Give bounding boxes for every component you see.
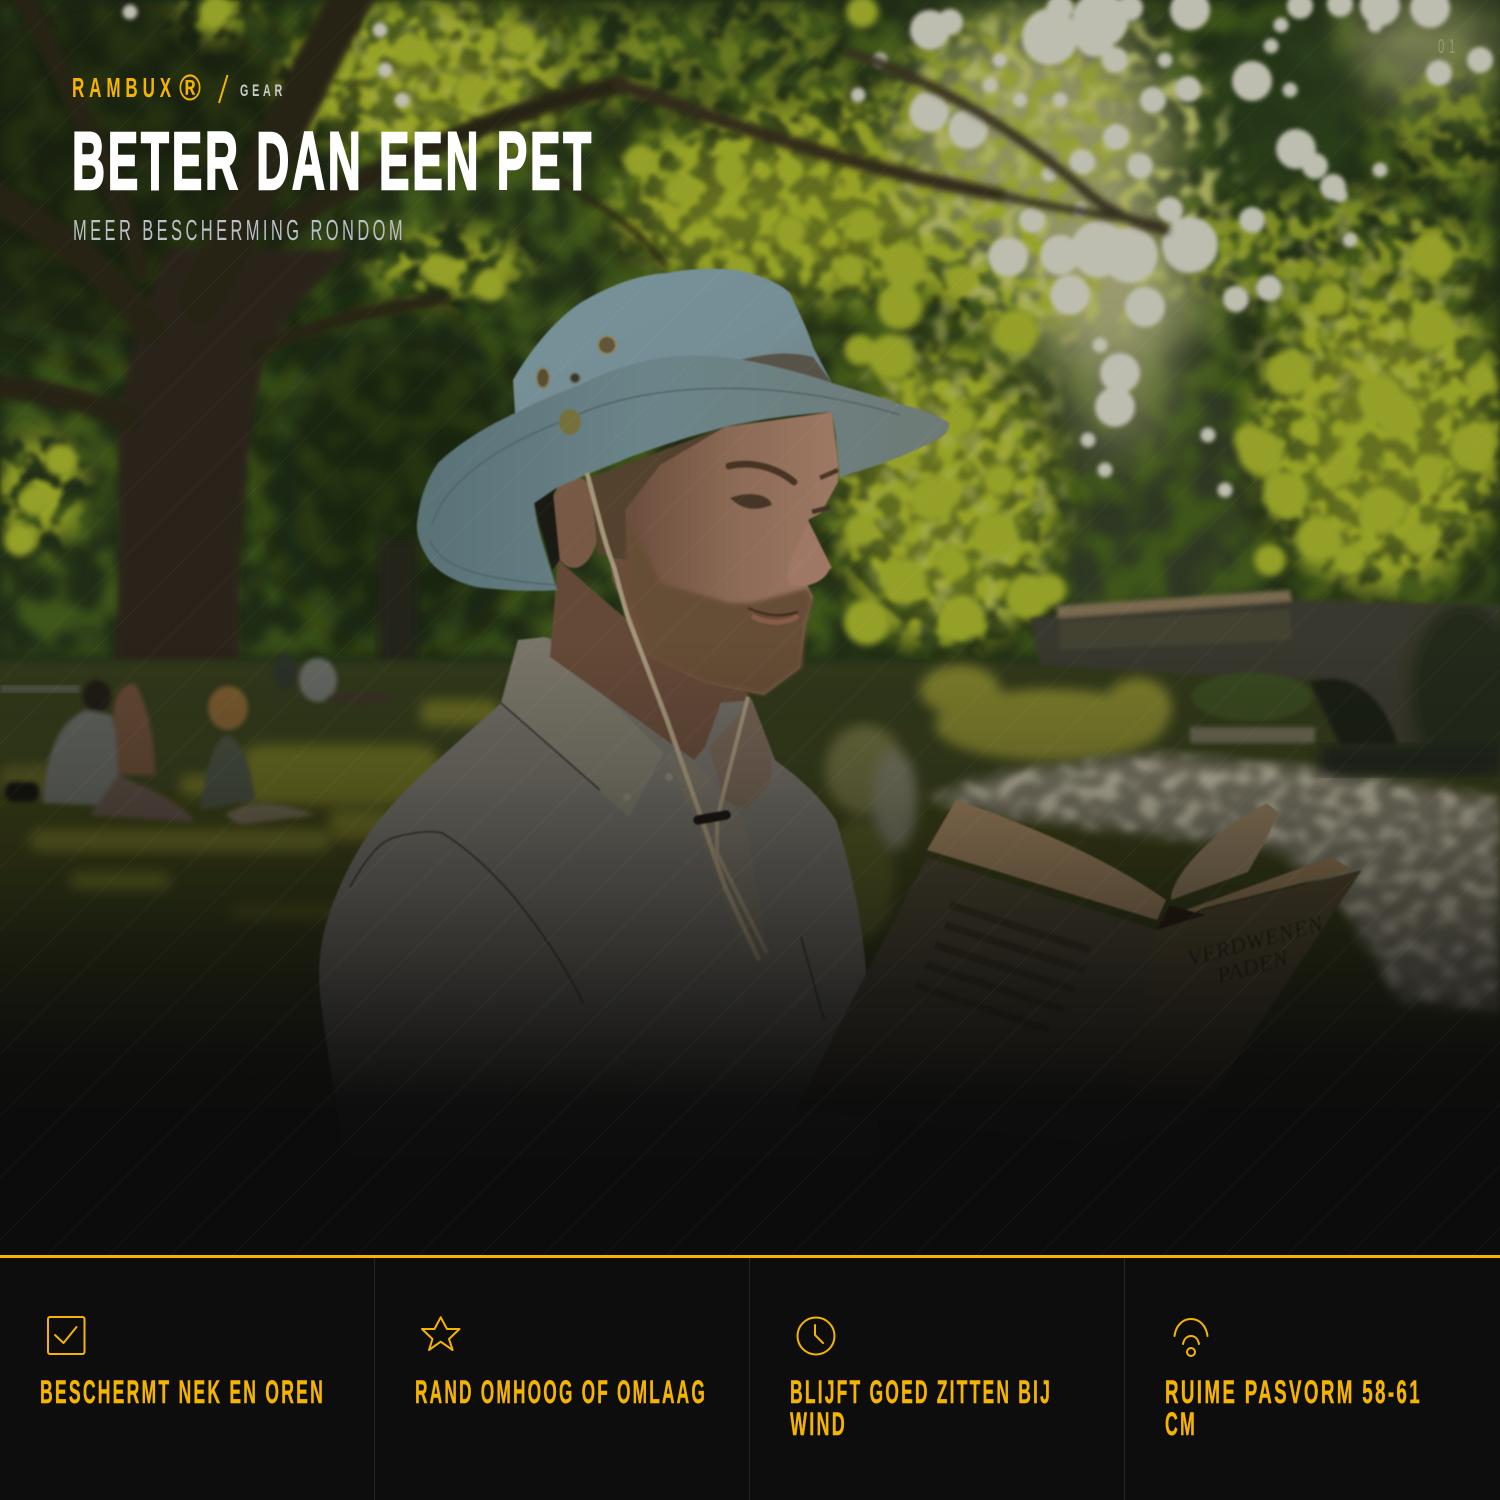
right pages bbox=[1160, 857, 1353, 928]
header text block bbox=[72, 67, 594, 247]
page curl bbox=[1171, 803, 1279, 900]
icon: star bbox=[422, 1317, 460, 1350]
label: BESCHERMT NEK EN OREN bbox=[40, 1374, 325, 1410]
strap toggle bbox=[698, 815, 726, 820]
open book bbox=[795, 800, 1362, 1145]
eyelet large bbox=[598, 336, 616, 354]
hat crown bbox=[513, 269, 832, 440]
snap button bbox=[559, 409, 581, 435]
label: RAND OMHOOG OF OMLAAG bbox=[415, 1374, 707, 1410]
nose shade bbox=[788, 522, 830, 586]
eyebrow bbox=[729, 464, 794, 482]
feature 2: brim up or down bbox=[415, 1317, 707, 1410]
collar right bbox=[709, 700, 771, 810]
label: WIND bbox=[790, 1406, 847, 1442]
brand name: RAMBUX bbox=[72, 72, 176, 103]
yellow leaf clusters bbox=[20, 12, 1480, 622]
man in hat bbox=[319, 269, 949, 1240]
subtitle: MEER BESCHERMING RONDOM bbox=[73, 215, 406, 247]
eyelet left bbox=[536, 368, 550, 388]
shirt seams bbox=[350, 703, 824, 1020]
person in grey shirt bbox=[43, 710, 119, 806]
olive glow under leaves bbox=[330, 30, 1480, 620]
stone bridge bbox=[1030, 590, 1500, 775]
beard bbox=[626, 520, 813, 695]
book cover title: VERDWENEN bbox=[1185, 911, 1326, 971]
page number: 01 bbox=[1438, 36, 1460, 58]
slash bbox=[219, 75, 228, 103]
title: BETER DAN EEN PET bbox=[72, 116, 594, 207]
feature strip bbox=[0, 1255, 1500, 1500]
book cover title: PADEN bbox=[1213, 945, 1292, 988]
book page text bbox=[915, 905, 1090, 1030]
riverside shrubs bbox=[825, 665, 1172, 940]
brim stitching bbox=[430, 388, 900, 585]
distant picnickers bbox=[299, 658, 337, 702]
background photo: park scene with man reading bbox=[0, 0, 1500, 1116]
grass lawn bbox=[0, 660, 1500, 1110]
right cover bbox=[1110, 870, 1362, 1145]
ear bbox=[549, 476, 599, 568]
left cover bbox=[795, 857, 1157, 1145]
shirt buttons bbox=[627, 777, 669, 797]
sky bokeh bbox=[130, 4, 1480, 490]
collar left bbox=[501, 637, 664, 817]
river bbox=[926, 742, 1500, 1012]
eyelet small bbox=[570, 373, 580, 383]
shirt bbox=[319, 637, 880, 1240]
feature 4: fit bbox=[1165, 1319, 1422, 1442]
face bbox=[600, 412, 838, 695]
distant tree trunk bbox=[378, 540, 418, 670]
label: CM bbox=[1165, 1406, 1197, 1442]
pale sky glow bbox=[910, 0, 1500, 450]
label: BLIJFT GOED ZITTEN BIJ bbox=[790, 1374, 1052, 1410]
picnic people bbox=[5, 654, 398, 825]
brand name: ® bbox=[179, 67, 201, 108]
person with tan hat bbox=[200, 735, 255, 810]
hat brim bbox=[417, 356, 949, 591]
icon: checkbox bbox=[48, 1317, 84, 1354]
neck bbox=[550, 560, 752, 760]
icon: signal arcs bbox=[1174, 1319, 1208, 1356]
feature 1: neck and ears bbox=[40, 1317, 325, 1410]
hair bbox=[590, 427, 725, 560]
oak trunk and branches bbox=[0, 0, 1165, 715]
tree canopy bbox=[0, 0, 1500, 720]
feature 3: wind bbox=[790, 1318, 1052, 1442]
mesh band bbox=[740, 354, 832, 383]
chin strap bbox=[587, 473, 759, 960]
eye bbox=[730, 494, 772, 509]
category: GEAR bbox=[240, 81, 286, 100]
bottom fade bbox=[0, 640, 1500, 1260]
left pages bbox=[927, 800, 1166, 920]
mouth bbox=[748, 608, 798, 615]
placket bbox=[664, 753, 770, 960]
person with long hair bbox=[114, 684, 155, 775]
icon: clock bbox=[798, 1318, 834, 1354]
